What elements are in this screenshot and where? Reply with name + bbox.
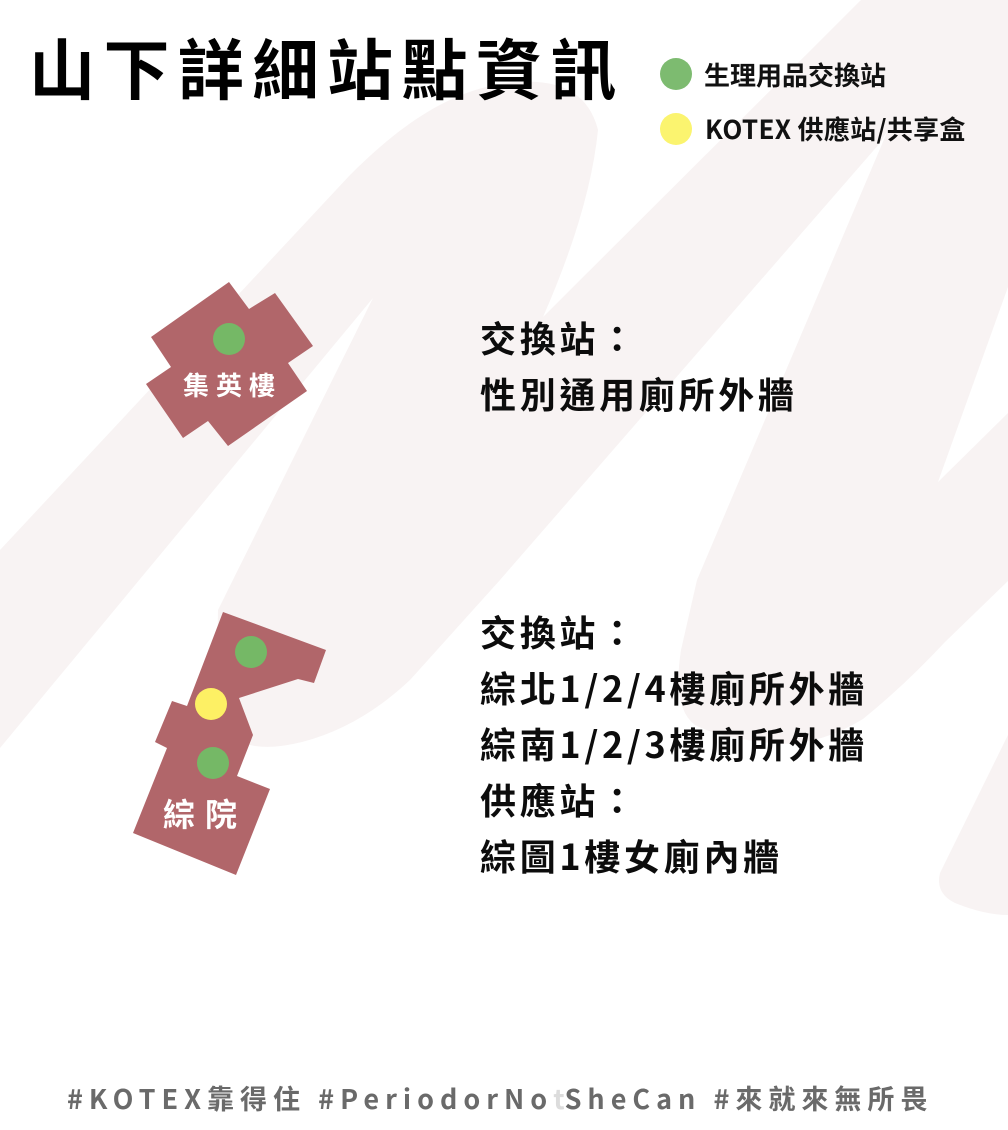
text block: 綜院 station info: 綜南1/2/3樓廁所外牆 — [480, 717, 868, 769]
legend label: exchange station: 生理用品交換站 — [704, 56, 886, 93]
icon: yellow supply station marker — [195, 688, 227, 720]
building shape — [146, 282, 313, 446]
text block: 綜院 station info — [480, 605, 868, 881]
legend icon: yellow supply station dot — [660, 113, 692, 145]
text block: 綜院 station info: 交換站： — [480, 605, 639, 657]
legend icon: green exchange station dot — [660, 58, 692, 90]
text block: 集英樓 station info — [480, 311, 798, 419]
building map: 綜院 — [133, 612, 326, 875]
building shape — [133, 612, 326, 875]
building label: 集英樓 — [183, 366, 282, 403]
text block: 綜院 station info: 綜圖1樓女廁內牆 — [480, 829, 783, 881]
text block: 集英樓 station info: 性別通用廁所外牆 — [480, 367, 798, 419]
legend — [660, 56, 966, 147]
building map: 集英樓 — [146, 282, 313, 446]
text block: 綜院 station info: 綜北1/2/4樓廁所外牆 — [480, 661, 868, 713]
icon: green exchange station marker — [213, 323, 245, 355]
text block: 綜院 station info: 供應站： — [480, 773, 639, 825]
text block: 集英樓 station info: 交換站： — [480, 311, 639, 363]
icon: green exchange station marker south — [197, 747, 229, 779]
legend label: supply station: KOTEX 供應站/共享盒 — [705, 110, 966, 147]
title: 山下詳細站點資訊 — [29, 18, 625, 114]
building label: 綜院 — [163, 790, 247, 836]
icon: green exchange station marker north — [235, 636, 267, 668]
footer hashtags: #KOTEX靠得住 #PeriodorNotSheCan #來就來無所畏 — [67, 1078, 933, 1117]
